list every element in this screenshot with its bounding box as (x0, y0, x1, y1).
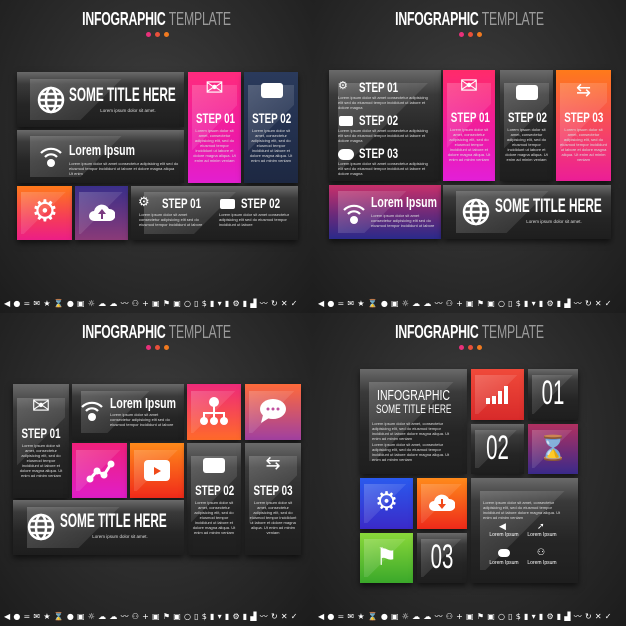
tile: flag: ⚑ (376, 543, 397, 571)
panel: pink step 01: Lorem ipsum dolor sit amet, consectetur adipisicing elit, sed do eiusmod tempor incididunt ut labore et dolore magna aliqua. Ut enim ad minim veniam (448, 127, 490, 162)
panel: step 02: STEP 02 (195, 482, 234, 498)
panel: icon list: ⚇ (537, 548, 545, 558)
quadrant 2 (313, 0, 626, 313)
panel: infographic big: SOME TITLE HERE (376, 402, 452, 416)
icon strip top right: ◀●=✉★⌛●▣☼☁☁〰⚇+▣⚑▣○▯$▮▾▮⚙▮▟〰↻✕✓ (318, 299, 615, 308)
tile: chat (245, 384, 301, 440)
tile: video (130, 443, 184, 498)
panel: step 01 / step 02: Lorem ipsum dolor sit amet consectetur adipisicing elit sed do eiusmod tempor incididunt ut labore (139, 212, 202, 227)
tile: 01: 01 (542, 374, 564, 412)
panel: steps list: Lorem ipsum dolor sit amet consectetur adipisicing elit sed do eiusmod tempor incididunt ut labore et dolore magna (338, 128, 428, 143)
panel: step 01 tall: STEP 01 (21, 425, 61, 441)
panel: steps list: ⚙ (338, 79, 348, 92)
panel: pink step 01: STEP 01 (196, 110, 235, 126)
panel: pink step 01 (188, 72, 241, 183)
title: INFOGRAPHIC TEMPLATE (82, 322, 231, 342)
dots (459, 32, 482, 37)
tile: hourglass (528, 424, 578, 474)
panel: navy step 02 (244, 72, 298, 183)
quadrant 4 (313, 313, 626, 626)
panel: step 02: Lorem ipsum dolor sit amet, consectetur adipisicing elit, sed do eiusmod tempor incididunt ut labore et dolore magna aliqua. Ut enim ad minim veniam (193, 500, 235, 535)
panel: step 01 tall (13, 384, 69, 498)
panel: some title here: Lorem ipsum dolor sit amet. (100, 108, 156, 113)
panel: step 03: STEP 03 (253, 482, 293, 498)
panel: icon list: Lorem Ipsum (527, 532, 557, 538)
panel: lorem ipsum: Lorem Ipsum (69, 142, 135, 159)
icon strip bottom right: ◀●=✉★⌛●▣☼☁☁〰⚇+▣⚑▣○▯$▮▾▮⚙▮▟〰↻✕✓ (318, 612, 615, 621)
tile: gears: ⚙ (32, 194, 58, 229)
panel: pink step 01: ✉ (205, 76, 224, 101)
panel: step 02 (187, 443, 241, 555)
quadrant 3 (0, 313, 313, 626)
icon strip bottom left: ◀●=✉★⌛●▣☼☁☁〰⚇+▣⚑▣○▯$▮▾▮⚙▮▟〰↻✕✓ (4, 612, 301, 621)
panel: infographic big: Lorem ipsum dolor sit amet, consectetur adipisicing elit, sed do eiusmod tempor incididunt ut labore dolore magna aliqua. Ut enim ad minim veniam (372, 421, 449, 441)
panel: steps list: STEP 01 (359, 79, 398, 95)
panel: orange step 03: STEP 03 (564, 109, 603, 125)
panel: lorem ipsum: Lorem ipsum dolor sit amet consectetur adipisicing elit sed do eiusmod tempor incididunt ut labore et dolore magna aliqua Ut enim (69, 161, 178, 176)
tile: bar chart (471, 369, 524, 420)
dots (146, 32, 169, 37)
panel: step 01 tall: Lorem ipsum dolor sit amet, consectetur adipisicing elit, sed do eiusmod tempor incididunt ut labore et dolore magna aliqua. Ut enim ad minim veniam (20, 443, 62, 478)
panel: dark step 02 (500, 70, 553, 181)
panel: step 01 / step 02: Lorem ipsum dolor sit amet consectetur adipisicing elit sed do eiusmod tempor incididunt ut labore (219, 212, 289, 227)
panel: dark step 02: Lorem ipsum dolor sit amet, consectetur adipisicing elit, sed do eiusmod tempor incididunt ut labore et dolore magna aliqua. Ut enim ad minim veniam (505, 127, 548, 162)
tile: 02 (471, 424, 524, 474)
tile: hourglass: ⌛ (538, 434, 568, 462)
panel: lorem ipsum gradient: Lorem ipsum dolor sit amet consectetur adipisicing elit sed do eiusmod tempor incididunt ut labore (371, 213, 434, 228)
panel: infographic big (360, 369, 467, 474)
panel: infographic big: Lorem ipsum dolor sit amet, consectetur adipisicing elit, sed do eiusmod tempor incididunt ut labore dolore magna aliqua. Ut enim ad minim veniam (372, 442, 449, 462)
panel: step 01 / step 02: STEP 01 (162, 195, 201, 211)
panel: step 01 / step 02: STEP 02 (241, 195, 280, 211)
tile: gears (17, 186, 72, 240)
tile: flag (360, 533, 413, 583)
dots (459, 345, 482, 350)
tile: cloud upload (75, 186, 128, 240)
panel: steps list: STEP 02 (359, 112, 398, 128)
panel: some title here (443, 185, 611, 239)
panel: steps list: STEP 03 (359, 145, 398, 161)
tile: 02: 02 (486, 429, 509, 467)
tile: 03: 03 (431, 538, 453, 576)
tile: cloud download (417, 478, 467, 529)
quadrant 1 (0, 0, 313, 313)
panel: icon list: ◀ (499, 522, 506, 532)
title: INFOGRAPHIC TEMPLATE (82, 9, 231, 29)
panel: some title here (17, 72, 184, 127)
panel: step 01 tall: ✉ (32, 394, 50, 419)
panel: step 01 / step 02 (131, 186, 298, 240)
panel: icon list (471, 478, 578, 583)
tile: gears blue: ⚙ (375, 487, 398, 517)
panel: steps list: Lorem ipsum dolor sit amet consectetur adipisicing elit sed do eiusmod tempor incididunt ut labore et dolore magna (338, 95, 428, 110)
panel: lorem ipsum gradient (329, 185, 441, 239)
panel: orange step 03: ⇆ (576, 80, 591, 101)
panel: pink step 01 (443, 70, 495, 181)
panel: navy step 02: STEP 02 (252, 110, 291, 126)
panel: lorem ipsum gradient: Lorem Ipsum (371, 194, 437, 211)
panel: orange step 03: Lorem ipsum dolor sit amet, consectetur adipisicing elit, sed do eiusmod tempor incididunt ut labore et dolore magna aliqua. Ut enim ad minim veniam (560, 127, 607, 162)
panel: some title here (13, 500, 184, 555)
tile: 03 (417, 533, 467, 583)
panel: infographic big: INFOGRAPHIC (377, 387, 450, 404)
panel: dark step 02: STEP 02 (508, 109, 547, 125)
panel: lorem ipsum: Lorem ipsum dolor sit amet consectetur adipisicing elit sed do eiusmod tempor incididunt ut labore (110, 412, 173, 427)
panel: orange step 03 (556, 70, 611, 181)
tile: 01 (528, 369, 578, 420)
panel: icon list: Lorem Ipsum (527, 560, 557, 566)
panel: step 03: ⇆ (265, 453, 281, 474)
title: INFOGRAPHIC TEMPLATE (395, 9, 544, 29)
title: INFOGRAPHIC TEMPLATE (395, 322, 544, 342)
panel: icon list: Lorem Ipsum (489, 532, 519, 538)
panel: steps list (329, 70, 441, 181)
tile: hierarchy (187, 384, 241, 440)
panel: some title here: SOME TITLE HERE (60, 511, 167, 532)
panel: lorem ipsum (72, 384, 184, 440)
tile: gears blue (360, 478, 413, 529)
panel: step 03 (245, 443, 301, 555)
panel: step 03: Lorem ipsum dolor sit amet, consectetur adipisicing elit, sed do eiusmod tempor incididunt ut labore et dolore magna aliqua. Ut enim ad minim veniam (250, 500, 296, 535)
panel: icon list: Lorem ipsum dolor sit amet, consectetur adipisicing elit, sed do eiusmod tempor incididunt ut labore dolore magna aliqua. Ut enim ad minim veniam (483, 500, 560, 520)
tile: line chart (72, 443, 127, 498)
panel: pink step 01: ✉ (460, 74, 478, 99)
panel: some title here: SOME TITLE HERE (495, 196, 602, 217)
panel: icon list: Lorem Ipsum (489, 560, 519, 566)
panel: some title here: Lorem ipsum dolor sit amet. (526, 219, 582, 224)
panel: steps list: Lorem ipsum dolor sit amet consectetur adipisicing elit sed do eiusmod tempor incididunt ut labore et dolore magna (338, 161, 428, 176)
panel: lorem ipsum: Lorem Ipsum (110, 395, 176, 412)
panel: navy step 02: Lorem ipsum dolor sit amet, consectetur adipisicing elit, sed do eiusmod tempor incididunt ut labore et dolore magna aliqua. Ut enim ad minim veniam (250, 128, 292, 163)
dots (146, 345, 169, 350)
panel: some title here: Lorem ipsum dolor sit amet. (92, 534, 148, 539)
panel: lorem ipsum (17, 130, 184, 183)
panel: step 01 / step 02: ⚙ (138, 195, 150, 210)
panel: icon list: ➚ (537, 522, 545, 532)
panel: some title here: SOME TITLE HERE (69, 85, 176, 106)
icon strip top left: ◀●=✉★⌛●▣☼☁☁〰⚇+▣⚑▣○▯$▮▾▮⚙▮▟〰↻✕✓ (4, 299, 301, 308)
panel: pink step 01: STEP 01 (451, 109, 490, 125)
panel: pink step 01: Lorem ipsum dolor sit amet, consectetur adipisicing elit, sed do eiusmod tempor incididunt ut labore et dolore magna aliqua. Ut enim ad minim veniam (193, 128, 236, 163)
